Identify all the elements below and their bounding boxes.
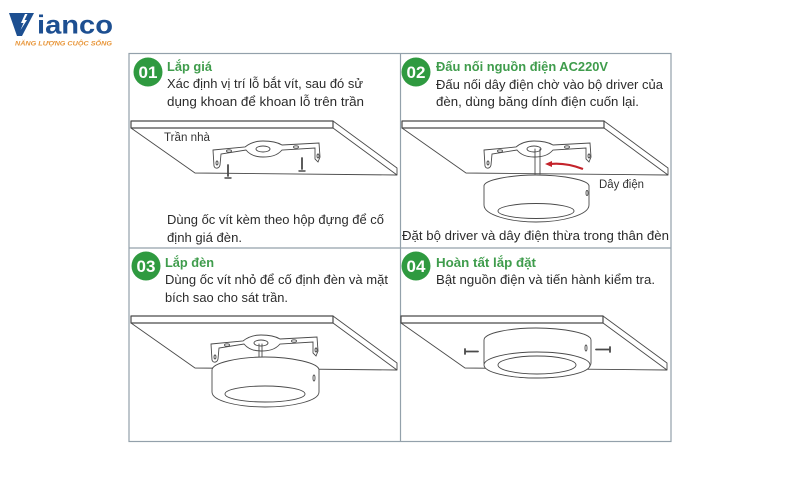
step 3 heading: Lắp đèn: [165, 255, 214, 270]
tagline: NĂNG LƯỢNG CUỘC SỐNG: [15, 38, 112, 48]
illustration: finished lamp with screws: [401, 316, 667, 378]
step 3 text: Dùng ốc vít nhỏ để cố định đèn và mặt: [165, 272, 388, 287]
icon: lightning V: [9, 13, 34, 36]
step 1 text: [167, 76, 364, 109]
step 3 badge: 03: [137, 257, 155, 276]
step 1 badge: [134, 58, 162, 86]
illustration: lamp fixed to bracket: [131, 316, 397, 407]
step 1 note: [167, 212, 384, 245]
step 3 text: bích sao cho sát trần.: [165, 290, 288, 305]
step 2 note: Đặt bộ driver và dây điện thừa trong thân đèn: [402, 228, 669, 243]
step 2 badge: [402, 58, 430, 86]
step 2 text: Đấu nối dây điện chờ vào bộ driver của: [436, 77, 664, 92]
grid frame: [129, 54, 671, 442]
step 3 text: [165, 272, 388, 305]
brand name: ianco: [37, 10, 113, 40]
step 1 note: Dùng ốc vít kèm theo hộp đựng để cố: [167, 212, 384, 227]
step 1 heading: Lắp giá: [167, 59, 212, 74]
step 4 heading: Hoàn tất lắp đặt: [436, 255, 537, 270]
icon: left screw: [465, 349, 478, 354]
step 2 heading: Đấu nối nguồn điện AC220V: [436, 60, 609, 74]
step 2 text: [436, 77, 664, 109]
panel: step 3: [131, 252, 397, 407]
lamp body: [484, 175, 589, 222]
step 1 badge: 01: [139, 63, 157, 82]
label: wire: Dây điện: [599, 179, 644, 191]
logo: [9, 10, 113, 48]
step 3 badge: [132, 252, 160, 280]
step 1 note: định giá đèn.: [167, 230, 242, 245]
label: ceiling: Trần nhà: [164, 132, 211, 144]
step 1 text: dụng khoan để khoan lỗ trên trần: [167, 94, 364, 109]
step 4 badge: 04: [407, 257, 426, 276]
panel: step 4: [401, 252, 667, 378]
illustration: ceiling plate with bracket and screws: [131, 121, 397, 178]
panel: step 1: [131, 58, 397, 245]
arrow: red wire pointer: [550, 164, 583, 169]
step 1 text: Xác định vị trí lỗ bắt vít, sau đó sử: [167, 76, 363, 91]
step 2 badge: 02: [407, 63, 425, 82]
step 4 text: Bật nguồn điện và tiến hành kiểm tra.: [436, 272, 655, 287]
step 4 badge: [402, 252, 430, 280]
icon: right screw: [596, 347, 610, 352]
panel: step 2: [402, 58, 669, 243]
step 2 text: đèn, dùng băng dính điện cuốn lại.: [436, 94, 639, 109]
illustration: driver wiring: [402, 121, 668, 222]
